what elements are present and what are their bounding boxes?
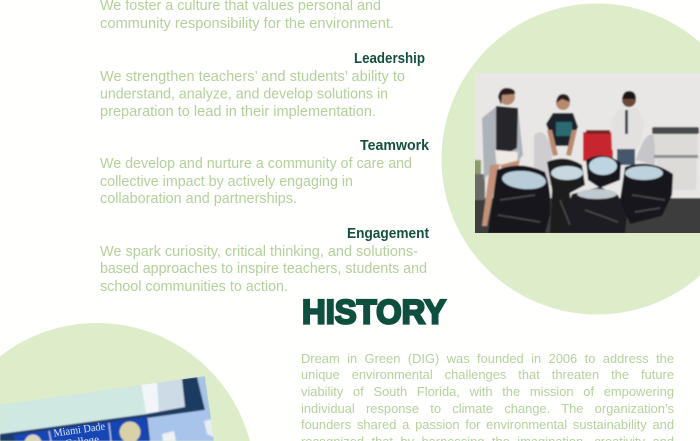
text block: history paragraph: founders shared a passion for environmental sustainability and bbox=[301, 417, 674, 432]
text block: leadership description: We strengthen teachers’ and students’ ability to bbox=[100, 69, 405, 85]
text block: history paragraph: Dream in Green (DIG) was founded in 2006 to address the bbox=[301, 350, 674, 366]
text block: responsibility description bbox=[100, 0, 394, 32]
bottles bbox=[501, 169, 547, 191]
text block: engagement description bbox=[100, 244, 427, 295]
text block: history paragraph: individual response to climate change. The organization’s bbox=[301, 401, 674, 416]
photo: students with recycling bags bbox=[473, 71, 700, 235]
text block: leadership description bbox=[100, 69, 405, 120]
heading: HISTORY: HISTORY bbox=[302, 294, 446, 332]
text block: teamwork description: collaboration and partnerships. bbox=[100, 191, 297, 207]
text block: leadership description: preparation to lead in their implementation. bbox=[100, 104, 376, 120]
person 2 bbox=[546, 113, 578, 146]
decorative circle: top right bbox=[442, 4, 700, 314]
bag wrinkles bbox=[498, 195, 665, 225]
person 3 bbox=[610, 132, 614, 151]
grey bin bbox=[653, 132, 698, 190]
text block: teamwork description: We develop and nurture a community of care and bbox=[100, 156, 412, 172]
text block: history paragraph bbox=[301, 350, 674, 441]
text block: history paragraph: unique environmental challenges that threaten the future bbox=[301, 367, 674, 382]
text block: responsibility description: community responsibility for the environment. bbox=[100, 16, 394, 32]
text block: engagement description: school communities to action. bbox=[100, 279, 288, 295]
heading: Leadership: Leadership bbox=[354, 51, 425, 67]
heading: Teamwork: Teamwork bbox=[360, 138, 430, 154]
decorative circle: bottom left bbox=[0, 323, 255, 441]
text block: history paragraph: viability of South Florida, with the mission of empowering bbox=[301, 384, 674, 399]
photo: Miami Dade College sign bbox=[0, 376, 214, 441]
trash bags bbox=[488, 165, 550, 233]
person 1 bbox=[482, 106, 523, 180]
text block: engagement description: based approaches to inspire teachers, students and bbox=[100, 261, 427, 277]
heading: Engagement: Engagement bbox=[347, 226, 429, 242]
text block: engagement description: We spark curiosity, critical thinking, and solutions- bbox=[100, 244, 418, 260]
red bin bbox=[583, 132, 613, 161]
text block: teamwork description bbox=[100, 156, 412, 207]
sign lettering: Miami Dade bbox=[53, 421, 106, 440]
text block: leadership description: understand, analyze, and develop solutions in bbox=[100, 86, 388, 102]
text block: teamwork description: collective impact by actively engaging in bbox=[100, 174, 353, 190]
